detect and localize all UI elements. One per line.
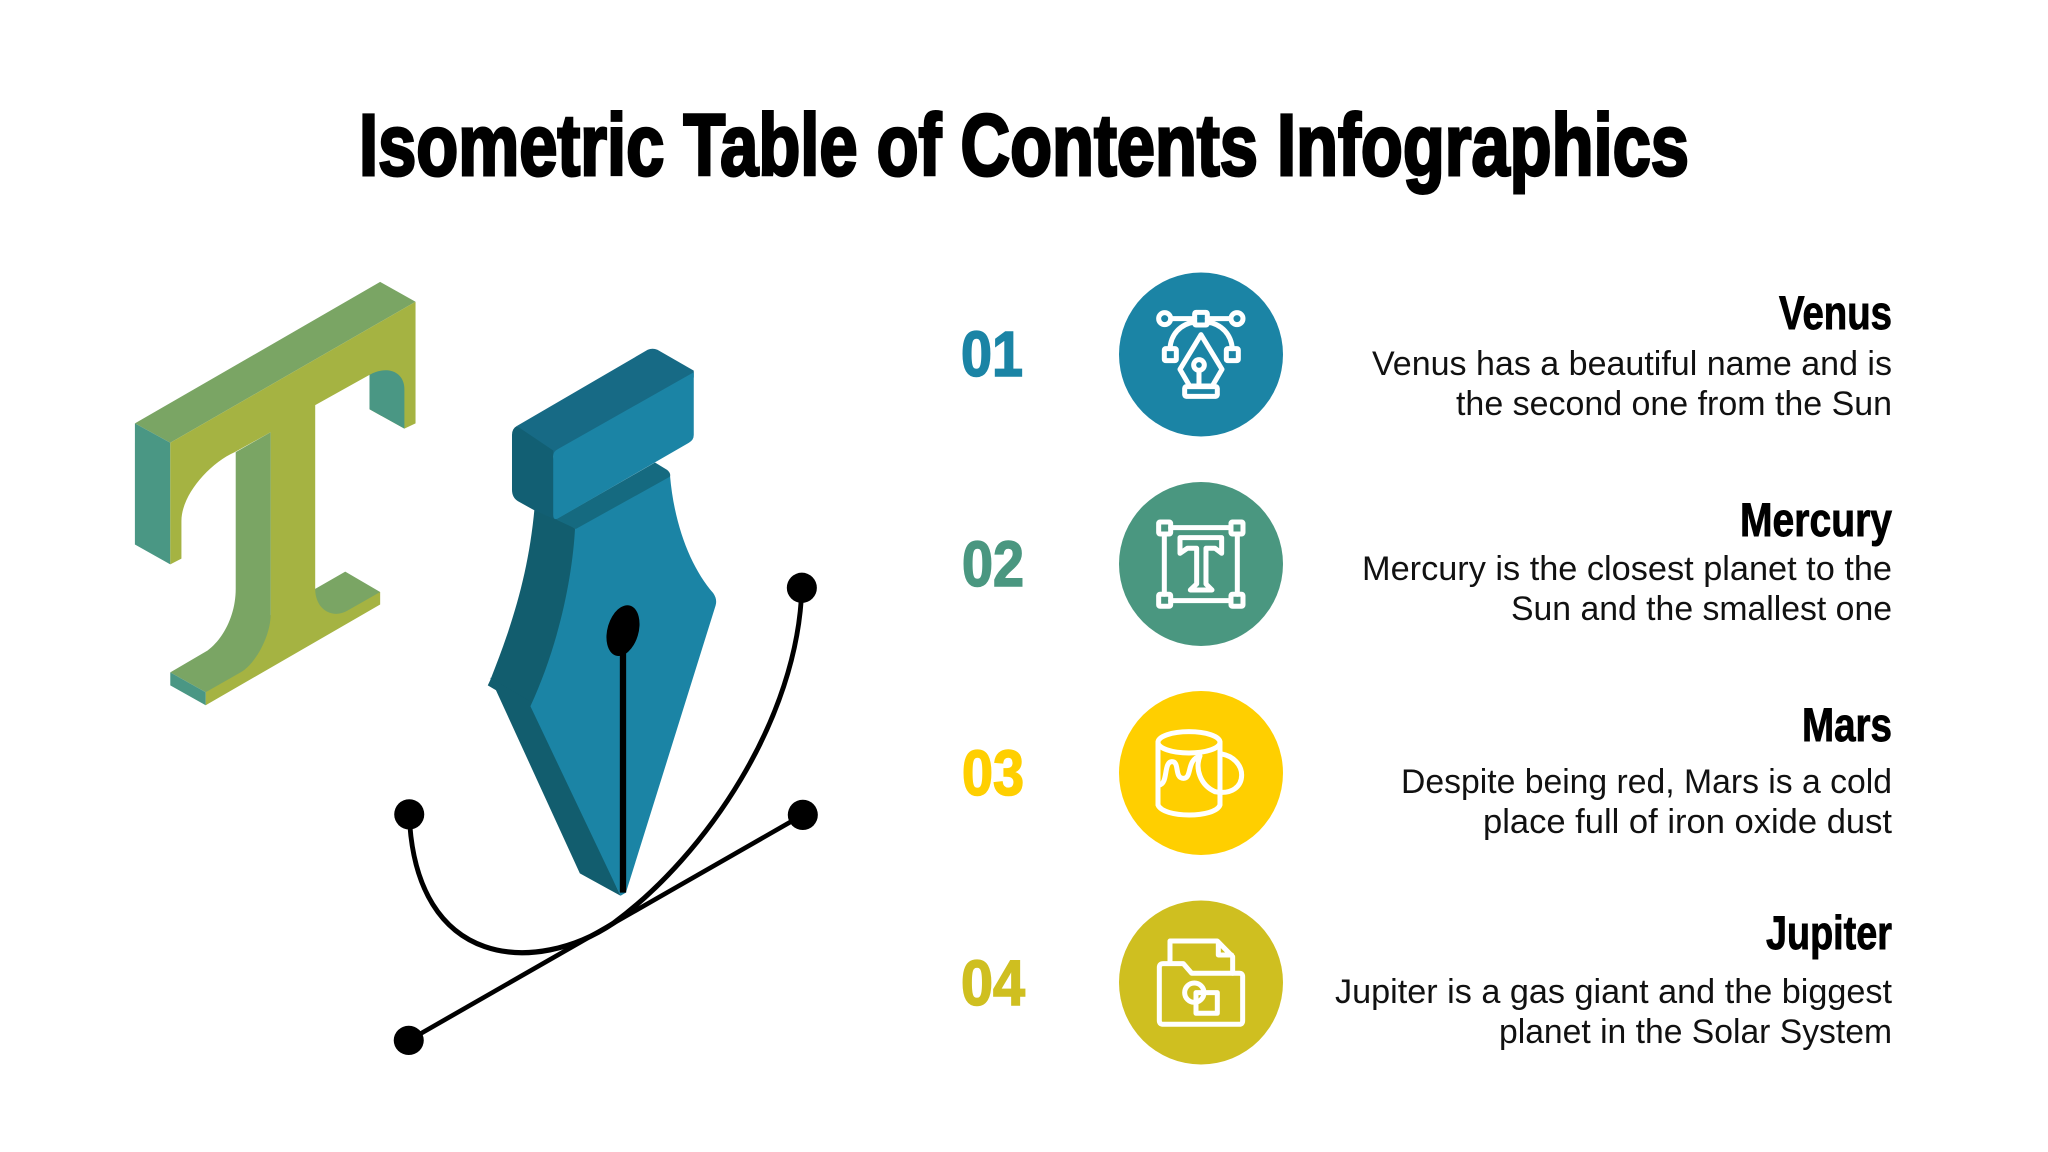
number 01: 01 [961, 318, 1023, 390]
heading: Mercury: Mercury [1740, 493, 1892, 546]
description: Mars: place full of iron oxide dust [1483, 803, 1893, 841]
number 04: 04 [961, 947, 1025, 1019]
description: Mercury [1362, 550, 1892, 628]
number 02: 02 [962, 528, 1024, 600]
circle 1 with pen tool icon [1119, 272, 1283, 436]
text block: Mercury [1362, 493, 1892, 628]
description: Venus: Venus has a beautiful name and is [1372, 345, 1892, 383]
description: Mercury: Mercury is the closest planet to the [1362, 550, 1892, 588]
description: Jupiter: Jupiter is a gas giant and the biggest [1335, 973, 1893, 1011]
number 03: 03 [962, 737, 1024, 809]
text block: Venus [1372, 286, 1892, 423]
description: Jupiter [1335, 973, 1893, 1051]
circle 2 with type icon [1119, 482, 1283, 646]
description: Venus [1372, 345, 1892, 423]
description: Mercury: Sun and the smallest one [1511, 590, 1892, 628]
text block: Jupiter [1335, 906, 1893, 1051]
illustration: isometric letter T [135, 282, 416, 705]
description: Venus: the second one from the Sun [1456, 385, 1892, 423]
heading: Venus: Venus [1779, 286, 1892, 339]
icon: paint bucket [1158, 732, 1242, 815]
circle 3 with paint bucket icon [1119, 691, 1283, 855]
description: Jupiter: planet in the Solar System [1499, 1013, 1892, 1051]
text block: Mars [1401, 698, 1893, 841]
title: Isometric Table of Contents Infographics [359, 97, 1689, 194]
icon: text box T [1159, 522, 1243, 606]
icon: design folder [1159, 941, 1243, 1024]
circle 4 with folder icon [1119, 900, 1283, 1064]
heading: Mars: Mars [1802, 698, 1892, 751]
icon: pen tool [1159, 312, 1243, 396]
description: Mars: Despite being red, Mars is a cold [1401, 763, 1892, 801]
heading: Jupiter: Jupiter [1766, 906, 1892, 959]
description: Mars [1401, 763, 1893, 841]
illustration: isometric pen nib with bezier curve [394, 349, 818, 1055]
